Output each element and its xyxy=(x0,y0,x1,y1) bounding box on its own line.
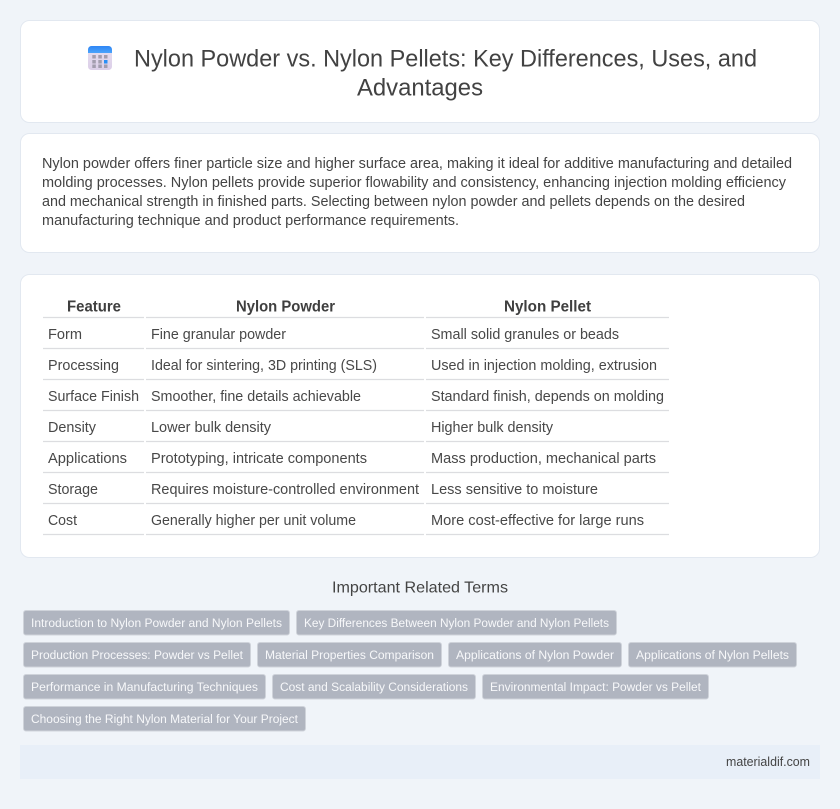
panel: introduction xyxy=(20,134,820,252)
row: surface finish: Smoother, fine details achievable xyxy=(151,389,361,405)
tag: material properties xyxy=(258,642,442,667)
row: form: Fine granular powder xyxy=(151,327,286,343)
tag: applications of pellets xyxy=(628,642,796,667)
title xyxy=(134,46,757,102)
related terms heading: Important Related Terms xyxy=(332,580,508,596)
row: cost: More cost-effective for large runs xyxy=(431,513,644,529)
row: cost: Generally higher per unit volume xyxy=(151,513,356,529)
row: storage: Less sensitive to moisture xyxy=(431,482,598,498)
row: density: Density xyxy=(48,420,97,436)
row: form: Small solid granules or beads xyxy=(431,327,619,343)
tag: applications of powder: Applications of Nylon Powder xyxy=(456,648,614,662)
row: storage: Requires moisture-controlled environment xyxy=(151,482,419,498)
row: density: Higher bulk density xyxy=(431,420,554,436)
related terms tags xyxy=(24,610,796,731)
tag: performance: Performance in Manufacturing Techniques xyxy=(31,680,258,694)
row: applications: Prototyping, intricate components xyxy=(151,451,367,467)
row: density xyxy=(48,420,554,436)
row: form xyxy=(48,327,619,343)
table header row: Feature xyxy=(67,298,121,316)
intro text block xyxy=(42,156,792,229)
intro text block: molding processes. Nylon pellets provide superior flowability and consistency, enhancing injection molding efficiency xyxy=(42,175,787,191)
tag: environmental impact: Environmental Impact: Powder vs Pellet xyxy=(490,680,702,694)
tag: applications of powder xyxy=(448,642,622,667)
row: density: Lower bulk density xyxy=(151,420,272,436)
row: applications: Applications xyxy=(48,451,127,467)
row: processing: Processing xyxy=(48,358,119,374)
row: cost xyxy=(48,513,644,529)
tag: introduction: Introduction to Nylon Powder and Nylon Pellets xyxy=(31,616,282,630)
table header row: Nylon Pellet xyxy=(504,298,592,316)
row: applications xyxy=(48,451,656,467)
table header row: Nylon Powder xyxy=(236,298,335,316)
tag: key differences: Key Differences Between Nylon Powder and Nylon Pellets xyxy=(304,616,609,630)
footer site name: materialdif.com xyxy=(726,755,810,769)
row: processing: Used in injection molding, extrusion xyxy=(431,358,657,374)
row: surface finish: Surface Finish xyxy=(48,389,139,405)
row: applications: Mass production, mechanical parts xyxy=(431,451,656,467)
tag: key differences xyxy=(296,610,616,635)
tag: production processes xyxy=(24,642,250,667)
table header row xyxy=(67,298,592,316)
row: surface finish xyxy=(48,389,664,405)
title: Advantages xyxy=(357,74,483,102)
tag: cost and scalability: Cost and Scalability Considerations xyxy=(280,680,468,694)
intro text block: Nylon powder offers finer particle size and higher surface area, making it ideal for additive manufacturing and detailed xyxy=(42,156,792,172)
tag: introduction xyxy=(24,610,290,635)
intro text block: manufacturing technique and product performance requirements. xyxy=(42,213,459,229)
tag: applications of pellets: Applications of Nylon Pellets xyxy=(636,648,789,662)
tag: performance xyxy=(24,674,266,699)
footer bar xyxy=(20,745,820,779)
row: storage xyxy=(48,482,598,498)
tag: production processes: Production Processes: Powder vs Pellet xyxy=(31,648,244,662)
panel: header xyxy=(20,20,820,122)
row: processing: Ideal for sintering, 3D printing (SLS) xyxy=(151,358,377,374)
intro text block: and mechanical strength in finished parts. Selecting between nylon powder and pellets depends on the desired xyxy=(42,194,745,210)
tag: material properties: Material Properties Comparison xyxy=(265,648,434,662)
icon: calendar xyxy=(88,46,112,70)
row: surface finish: Standard finish, depends on molding xyxy=(431,389,664,405)
row: cost: Cost xyxy=(48,513,77,529)
tag: choosing material: Choosing the Right Nylon Material for Your Project xyxy=(31,712,299,726)
panel: comparison table xyxy=(20,274,820,558)
tag: environmental impact xyxy=(482,674,708,699)
row: storage: Storage xyxy=(48,482,98,498)
row: form: Form xyxy=(48,327,82,343)
row: processing xyxy=(48,358,657,374)
tag: choosing material xyxy=(24,706,306,731)
tag: cost and scalability xyxy=(272,674,476,699)
title: Nylon Powder vs. Nylon Pellets: Key Differences, Uses, and xyxy=(134,46,757,72)
